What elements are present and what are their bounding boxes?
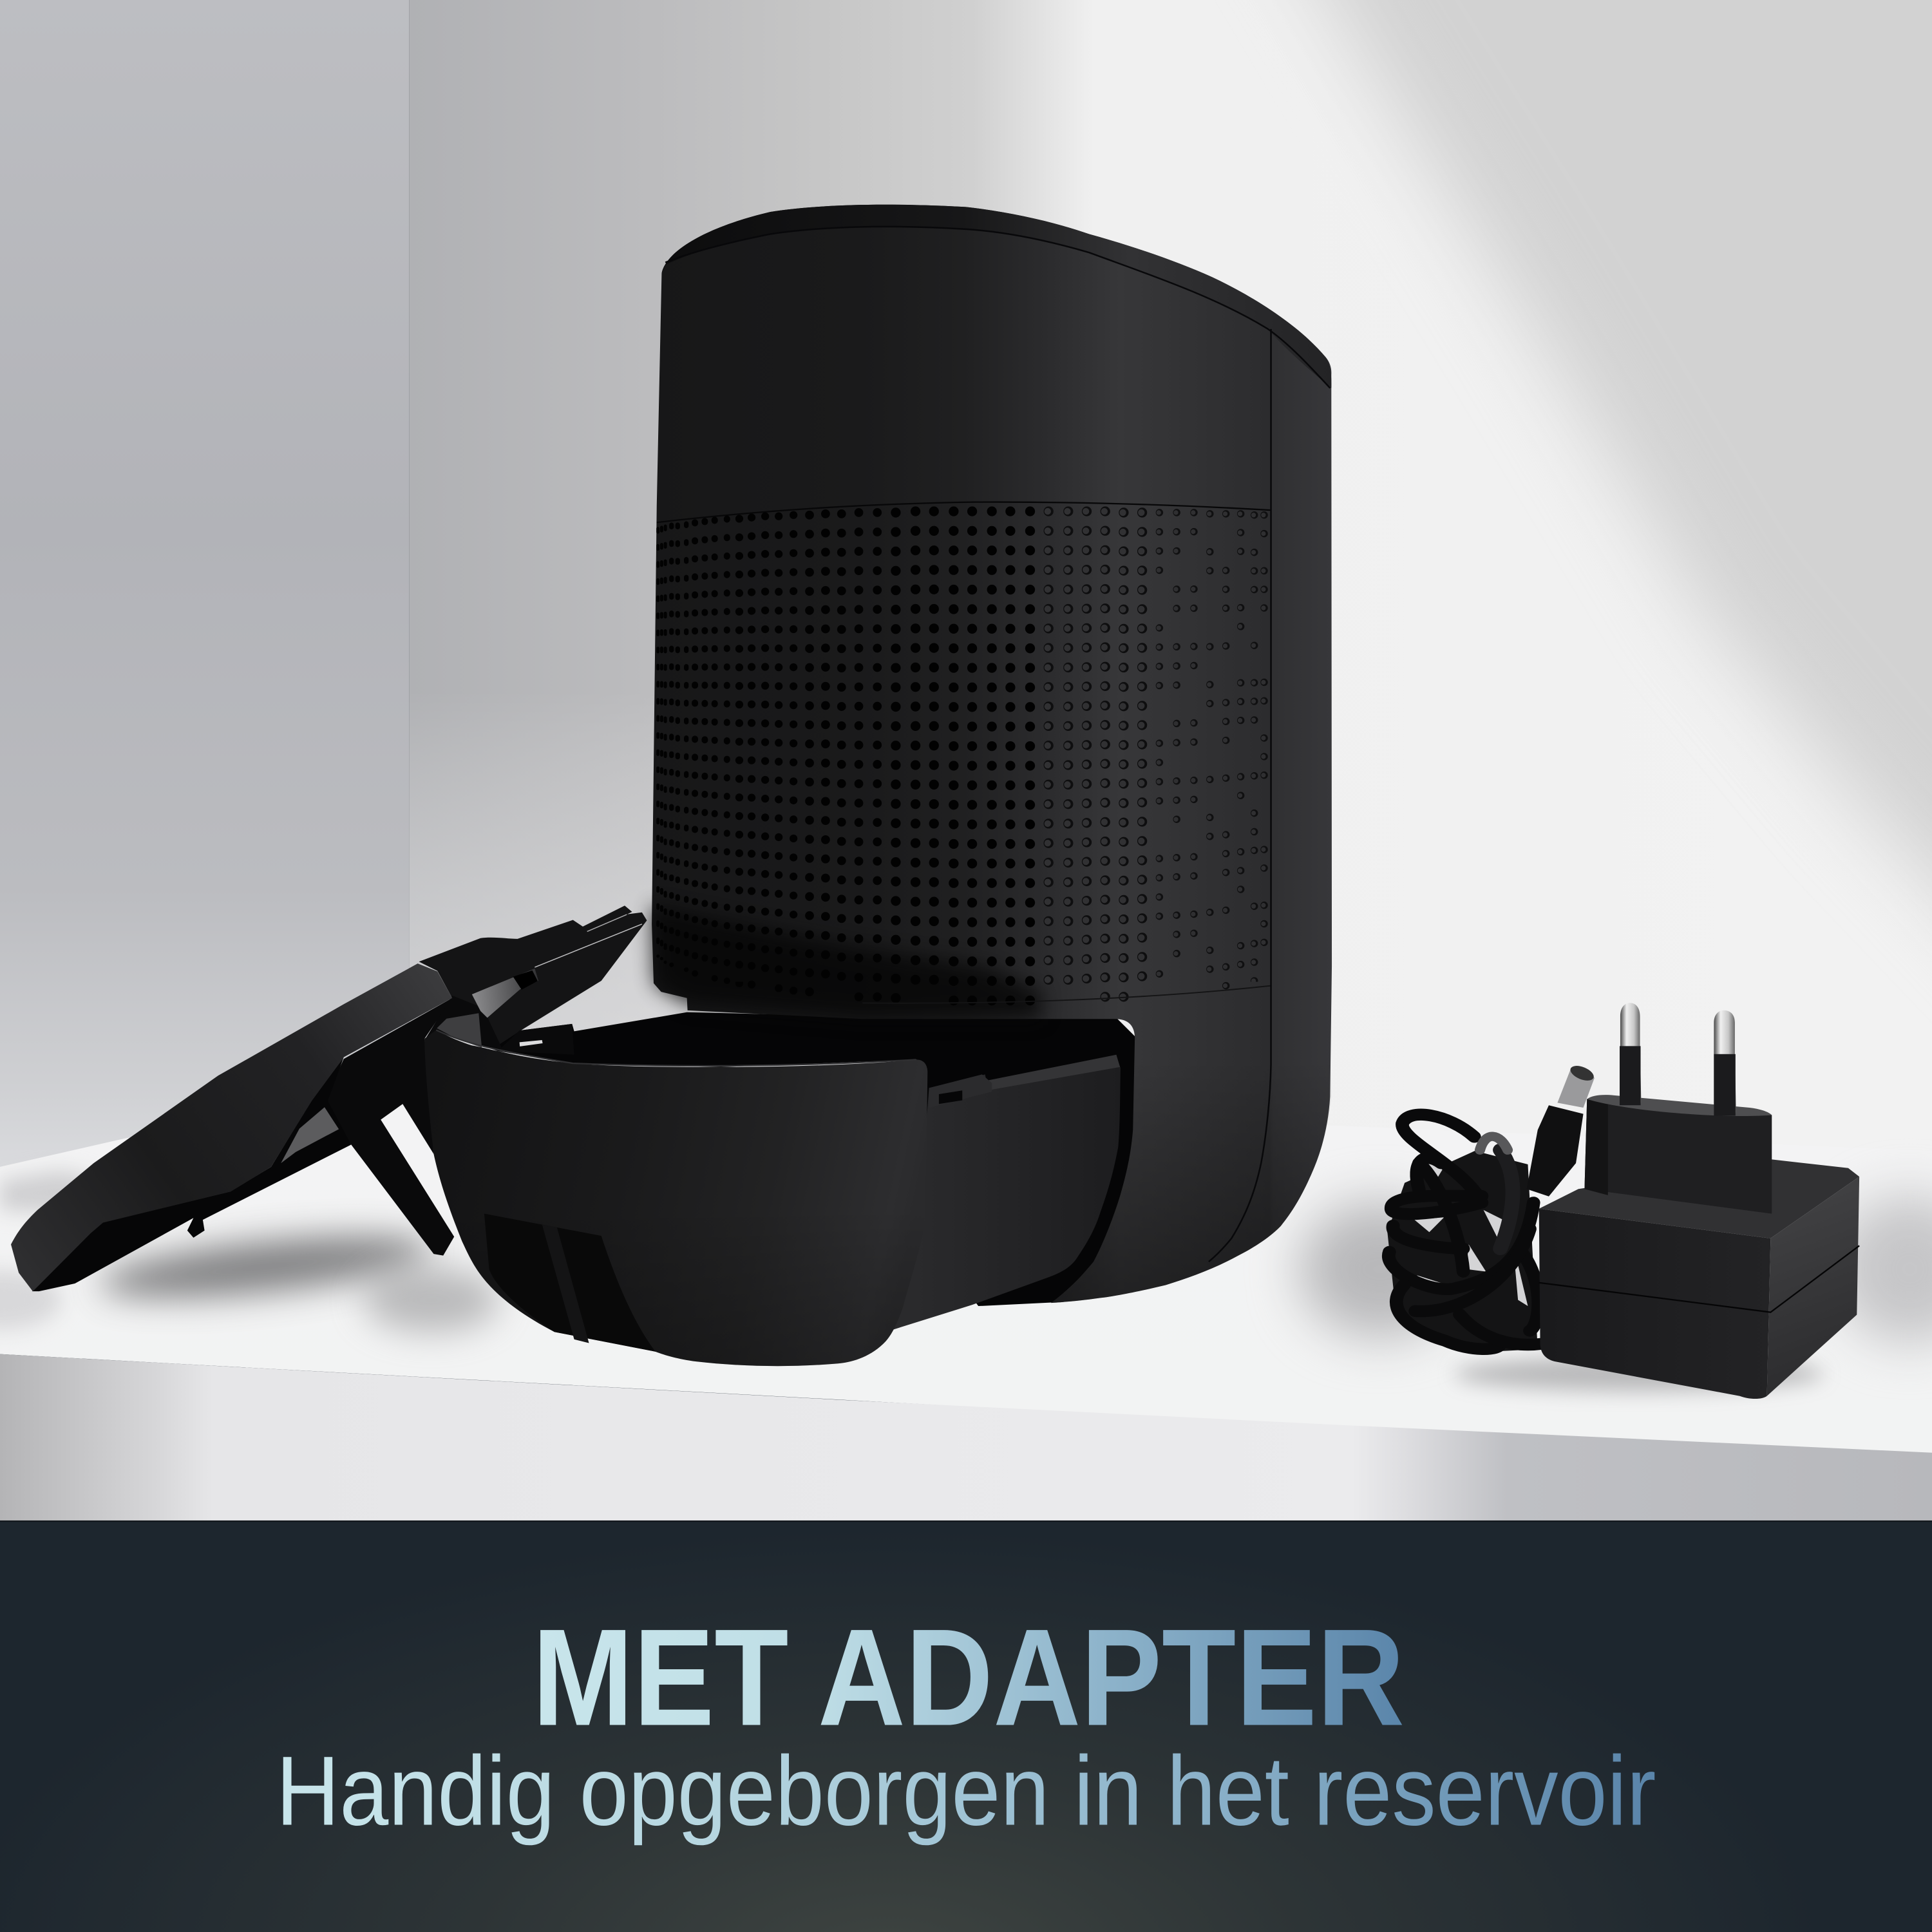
lid underside gloss [281,1107,339,1163]
tray clip [929,1074,992,1108]
reservoir notch [484,1214,656,1352]
notch rib [542,1225,589,1343]
left pin [1620,1003,1641,1105]
reservoir drawer [424,1013,1121,1366]
photo background: room and table [0,0,1932,1523]
dehumidifier body [436,205,1332,1306]
lid highlight line lower [535,924,642,967]
coiled cable [1388,1115,1541,1349]
adapter right face [1767,1177,1859,1396]
support leg and connector [325,998,454,1256]
reservoir inner wall gloss [437,1013,482,1048]
subtitle: Handig opgeborgen in het reservoir [276,1736,1656,1846]
back wall [409,0,1932,1183]
lid underside black [32,1057,351,1291]
connector sleeve [1527,1105,1584,1197]
left wall [0,0,409,1183]
grille ring outlines right side [1048,511,1142,999]
lid black tab [513,971,538,990]
tray clip hole [939,1090,962,1104]
clip bracket [498,1024,574,1055]
main housing [652,205,1332,1303]
barrel tip [1568,1063,1596,1083]
drawer rear tray [889,1058,1121,1331]
band top edge [0,1520,1932,1522]
grille bottom shading [652,905,1041,1019]
shadow near reservoir [363,1268,499,1332]
adapter front face [1539,1209,1770,1399]
gaps in cable coil [1414,1160,1528,1306]
lower housing shading [1051,1059,1331,1303]
tray lip [987,1055,1120,1090]
diagonal shadow on wall [1257,0,1932,1047]
wall lower glow [409,690,1173,1133]
lid upper gloss [472,969,538,1018]
bottom caption band [0,1520,1932,1932]
caption background [0,1521,1932,1932]
table left light streaks [0,1171,135,1214]
top lid rim [661,205,1331,388]
plug body [1584,1099,1772,1214]
grille sparse holes far right [1159,513,1264,993]
reservoir bottom shading [446,1183,924,1366]
power adapter with cable [1387,1003,1859,1399]
dark fill behind reservoir rim [424,996,503,1050]
grille sparse hole centers [1159,513,1264,993]
perforated grille dark holes [658,511,1030,1001]
grille ring centers right side [1048,511,1141,999]
grille top edge [657,502,1271,522]
shadow under lid [97,1225,433,1309]
grille bottom edge [862,986,1271,1003]
reservoir rim highlight [436,1030,916,1066]
lid upper section [419,905,647,1045]
plug left edge [1584,1099,1608,1195]
adapter top face [1539,1159,1859,1238]
lid outer band [11,963,452,1291]
cable dark mass [1387,1151,1538,1353]
shadow under adapter [1454,1357,1824,1391]
lid of reservoir [11,905,647,1291]
table top [0,1087,1932,1454]
lid highlight line upper [587,914,627,931]
adapter seam [1539,1245,1859,1312]
right pin [1714,1010,1736,1115]
lid seam line [665,227,1330,388]
title: MET ADAPTER [533,1601,1405,1755]
panel seam [1209,329,1271,1262]
clip slot [520,1040,543,1046]
dc barrel connector [1557,1067,1595,1108]
cavity interior [436,1012,1137,1306]
table front face [0,1354,1932,1523]
reservoir front shell [424,1030,927,1366]
table lower left tint [0,1271,62,1329]
shadow beside body [1300,1201,1460,1337]
plug top face [1587,1095,1772,1116]
shadow right of adapter [1836,1195,1932,1343]
